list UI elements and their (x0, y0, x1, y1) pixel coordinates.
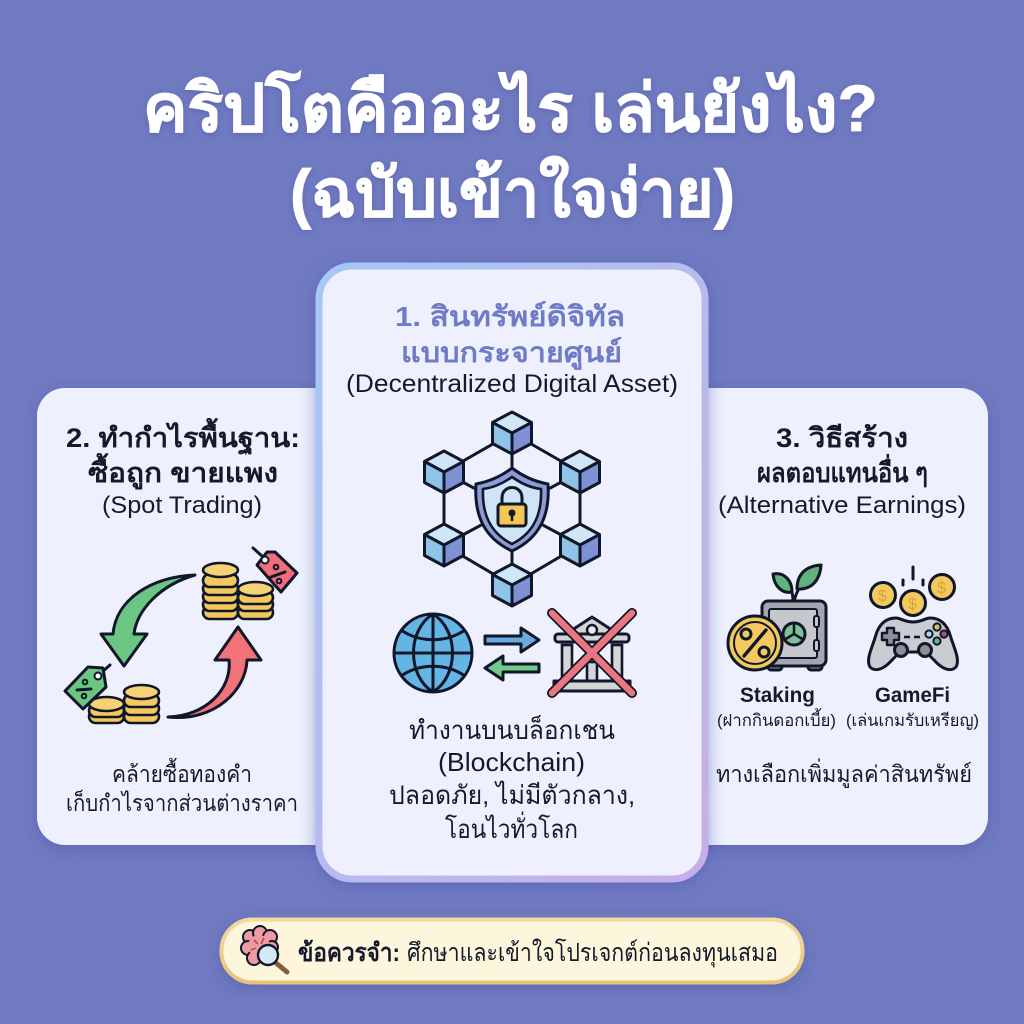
text: spot trading description: เก็บกำไรจากส่วนต่างราคา (66, 788, 298, 816)
arrow: from bank (485, 656, 539, 680)
text: alternative earnings description: ทางเลือกเพิ่มมูลค่าสินทรัพย์ (716, 758, 972, 788)
heading: spot trading: 2. ทำกำไรพื้นฐาน: (66, 417, 300, 456)
panel: spot trading (37, 388, 357, 845)
icon: gamefi controller: $ (937, 580, 946, 597)
heading: alternative earnings: ผลตอบแทนอื่น ๆ (757, 453, 928, 488)
text: reminder (298, 938, 778, 968)
label: gamefi: (เล่นเกมรับเหรียญ) (846, 711, 979, 730)
icon: gamefi controller: $ (878, 588, 887, 605)
arrow: to bank (485, 628, 539, 652)
heading: spot trading: ซื้อถูก ขายแพง (88, 452, 278, 490)
heading: decentralized digital asset: 1. สินทรัพย์ดิจิทัล (395, 301, 625, 332)
label: gamefi (846, 684, 979, 730)
panel: alternative earnings (668, 388, 988, 845)
label: staking (717, 684, 836, 730)
icon: buy low sell high cycle (65, 548, 297, 723)
text: spot trading description (66, 758, 298, 816)
label: staking: (ฝากกินดอกเบี้ย) (717, 708, 836, 730)
icon: staking safe (728, 565, 826, 670)
text: spot trading description: คล้ายซื้อทองคำ (112, 758, 252, 787)
text: blockchain description: โอนไวทั่วโลก (445, 811, 578, 844)
text: reminder: ข้อควรจำ: (298, 939, 400, 967)
text: blockchain description (389, 714, 635, 844)
text: blockchain description: ทำงานบนบล็อกเชน (409, 714, 615, 745)
icon: blockchain network with shield (424, 412, 600, 606)
heading: spot trading (66, 417, 300, 519)
title (143, 69, 878, 230)
panel: decentralized digital asset (319, 266, 705, 879)
heading: decentralized digital asset: (Decentralized Digital Asset) (346, 370, 678, 398)
icon: brain with magnifier (241, 926, 287, 972)
title: คริปโตคืออะไร เล่นยังไง? (143, 69, 878, 145)
heading: alternative earnings: 3. วิธีสร้าง (776, 423, 908, 453)
icon: gamefi controller (869, 567, 957, 670)
label: gamefi: GameFi (875, 684, 950, 707)
text: blockchain description: ปลอดภัย, ไม่มีตัวกลาง, (389, 780, 635, 810)
title: (ฉบับเข้าใจง่าย) (290, 154, 735, 230)
label: staking: Staking (740, 684, 815, 707)
heading: spot trading: (Spot Trading) (102, 492, 262, 519)
text: blockchain description: (Blockchain) (438, 747, 585, 777)
heading: alternative earnings: (Alternative Earnings) (718, 492, 966, 519)
heading: decentralized digital asset (346, 301, 678, 398)
heading: decentralized digital asset: แบบกระจายศูนย์ (401, 337, 622, 370)
icon: crossed-out bank (552, 613, 632, 693)
icon: globe (394, 614, 472, 692)
heading: alternative earnings (718, 423, 966, 519)
callout: key reminder (222, 920, 802, 982)
text: reminder: ศึกษาและเข้าใจโปรเจกต์ก่อนลงทุนเสมอ (407, 938, 778, 968)
icon: gamefi controller: $ (908, 596, 917, 613)
